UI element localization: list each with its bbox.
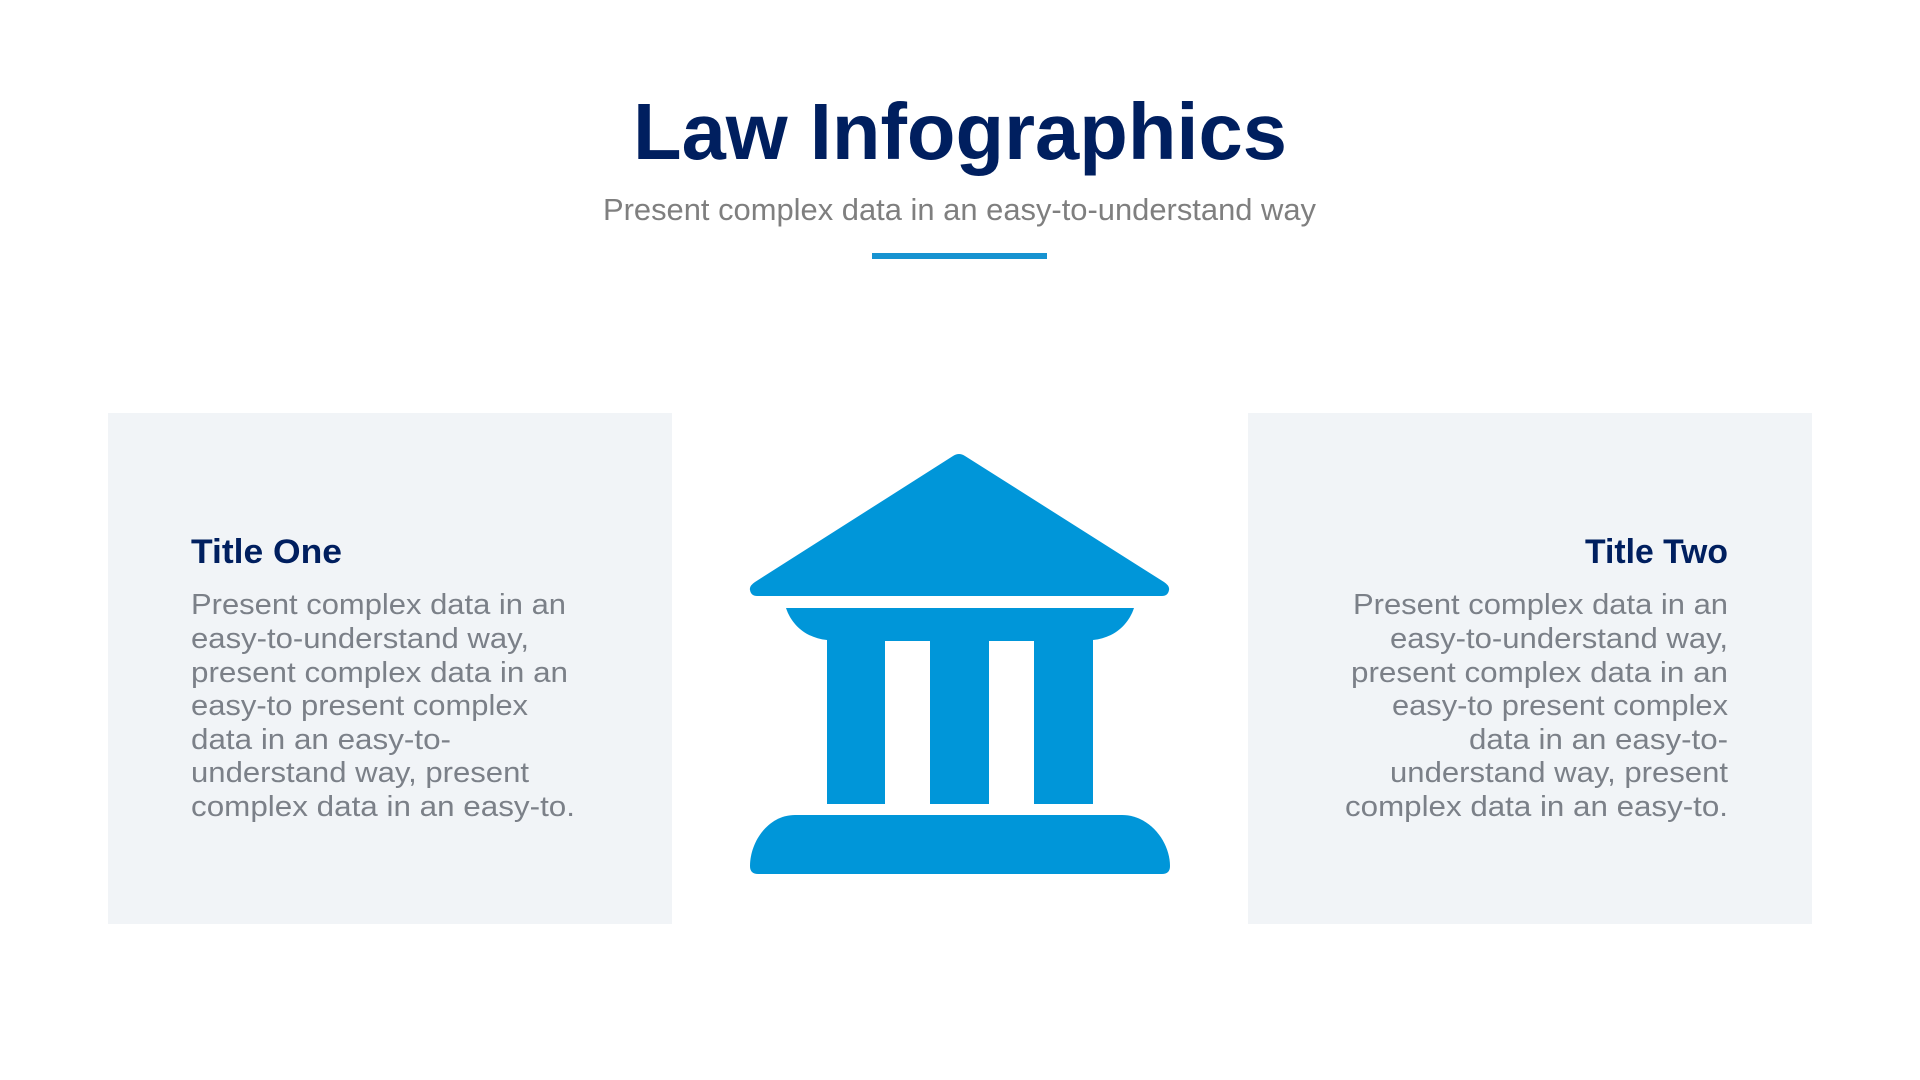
text block: title one description: present complex data in an [191, 657, 568, 689]
subtitle: Present complex data in an easy-to-understand way [603, 192, 1316, 227]
icon part: capital and columns [786, 608, 1134, 804]
text block: title one description: understand way, present [191, 757, 529, 789]
text block: title two description: complex data in an easy-to. [1345, 791, 1728, 823]
text block: title one description: easy-to-understand way, [191, 623, 529, 655]
icon part: base [750, 815, 1170, 874]
accent rule under heading [872, 253, 1047, 259]
title: Law Infographics [633, 87, 1287, 176]
text block: title two description: easy-to present complex [1392, 690, 1729, 722]
text block: title one description: data in an easy-to- [191, 724, 451, 756]
text block: title one description: easy-to present complex [191, 690, 529, 722]
text block: title one description: Present complex data in an [191, 589, 566, 621]
text block: title two description: Present complex data in an [1353, 589, 1728, 621]
text block: title two description [1345, 589, 1729, 823]
panel: title one [108, 413, 672, 924]
icon: courthouse with columns [750, 454, 1170, 874]
text block: title two description: understand way, present [1390, 757, 1728, 789]
text block: title one description: complex data in an easy-to. [191, 791, 575, 823]
panel: title two [1248, 413, 1812, 924]
text block: title two description: easy-to-understand way, [1390, 623, 1728, 655]
text block: title two description: present complex data in an [1351, 657, 1728, 689]
text block: title two description: data in an easy-to- [1469, 724, 1728, 756]
heading: title two: Title Two [1585, 533, 1728, 571]
text block: title one description [191, 589, 575, 823]
heading: title one: Title One [191, 533, 342, 571]
icon part: roof [750, 454, 1169, 596]
